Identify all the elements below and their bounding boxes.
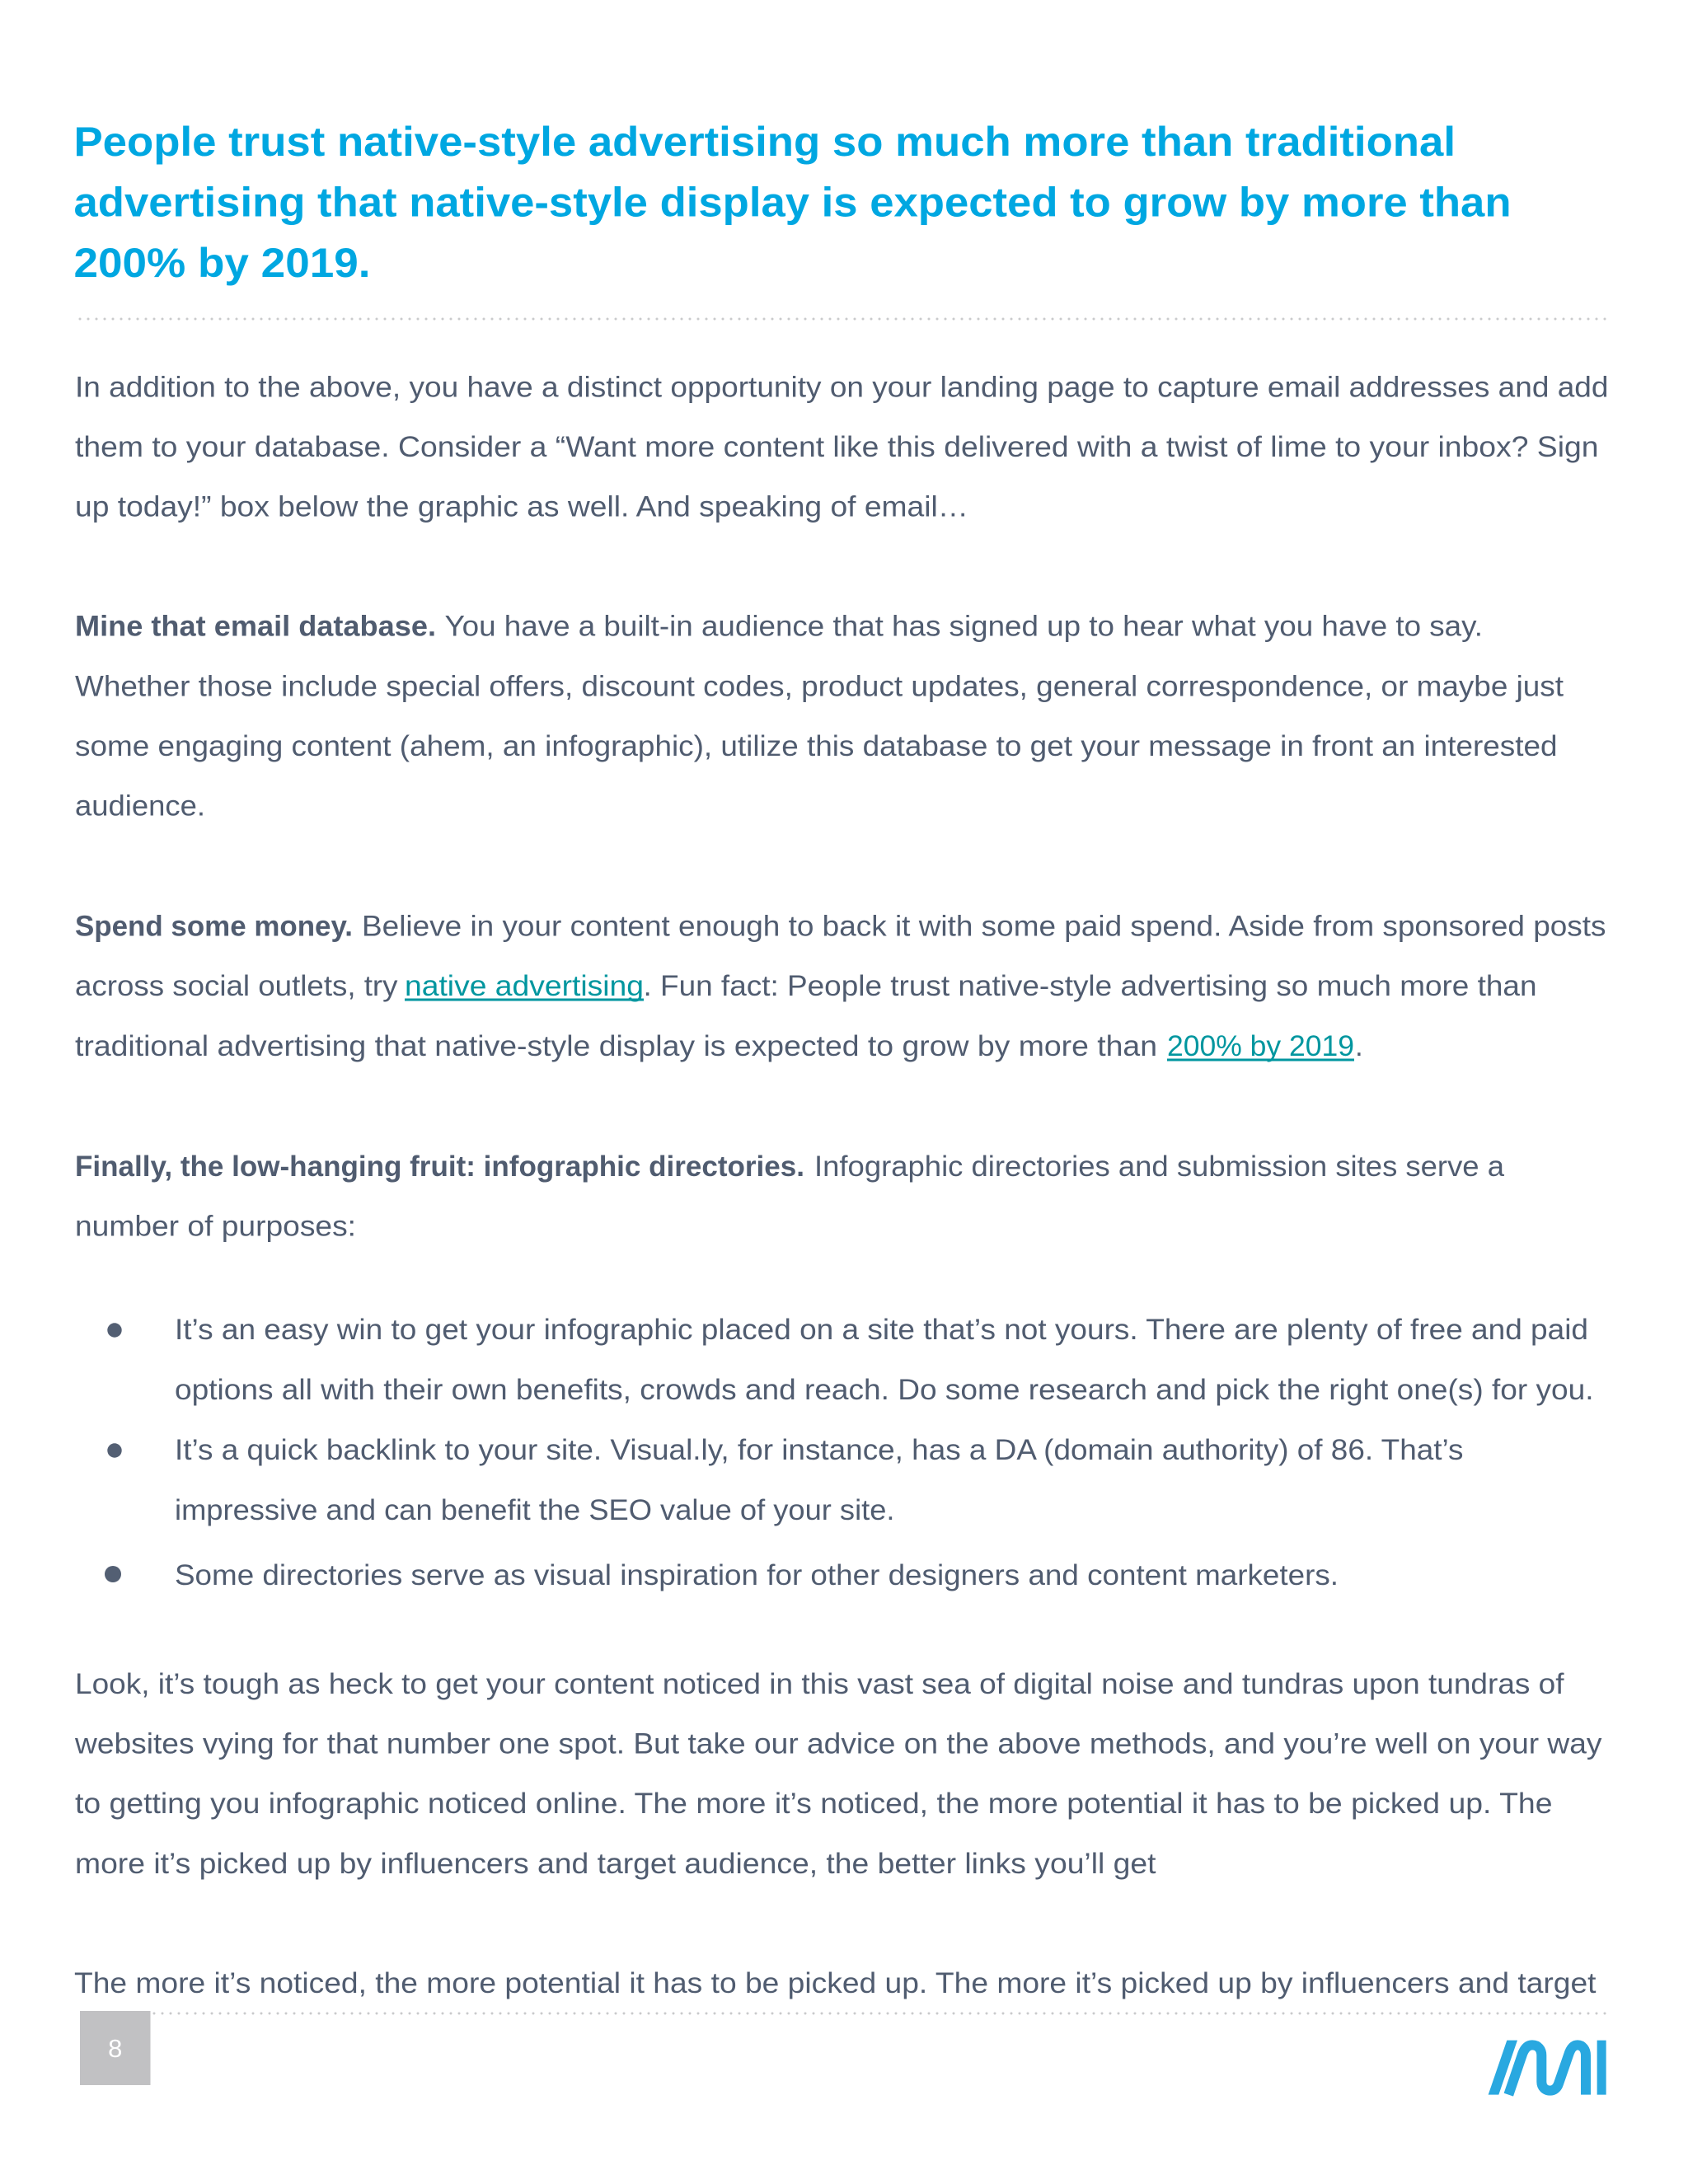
title: [74, 119, 1512, 286]
title: advertising that native-style display is expected to grow by more than: [74, 180, 1512, 226]
paragraph: landing page email capture: In addition to the above, you have a distinct opportunity on your landing page to capture email addresses and add: [75, 371, 1609, 404]
paragraph: spend some money: 200% by 2019: [1167, 1030, 1354, 1062]
paragraph: mine that email database: You have a built-in audience that has signed up to hear what you have to say.: [445, 610, 1483, 643]
paragraph: spend some money: .: [1355, 1030, 1363, 1062]
icon: IMI logo: [1489, 2041, 1606, 2095]
title: People trust native-style advertising so much more than traditional: [74, 119, 1456, 165]
paragraph: landing page email capture: [75, 371, 1609, 523]
paragraph: spend some money: . Fun fact: People trust native-style advertising so much more than: [643, 970, 1536, 1002]
paragraph: closing advice: [74, 1668, 1602, 1880]
paragraph: spend some money: [75, 910, 1606, 1062]
paragraph: spend some money: traditional advertising that native-style display is expected to grow by more than: [75, 1030, 1157, 1062]
paragraph: closing advice: Look, it’s tough as heck to get your content noticed in this vast sea of digital noise and tundras upon tundras of: [75, 1668, 1564, 1700]
bullet: quick backlink: [107, 1434, 1464, 1526]
paragraph: infographic directories: Finally, the low-hanging fruit: infographic directories.: [75, 1151, 804, 1183]
bullet: quick backlink: impressive and can benefit the SEO value of your site.: [175, 1494, 895, 1526]
paragraph: spend some money: Spend some money.: [75, 910, 353, 943]
paragraph: closing advice: websites vying for that number one spot. But take our advice on the above methods, and you’re well on your way: [74, 1727, 1602, 1760]
bullet: visual inspiration: Some directories serve as visual inspiration for other designers and content marketers.: [175, 1559, 1339, 1591]
paragraph: cut-off final line: The more it’s noticed, the more potential it has to be picked up. The more it’s picked up by influencers and target: [74, 1967, 1597, 1999]
page number box: 8: [108, 2034, 122, 2063]
paragraph: landing page email capture: them to your database. Consider a “Want more content like this delivered with a twist of lime to your inbox? Sign: [75, 431, 1599, 463]
paragraph: infographic directories: Infographic directories and submission sites serve a: [814, 1151, 1505, 1183]
bullet: easy win: It’s an easy win to get your infographic placed on a site that’s not yours. There are plenty of free and paid: [175, 1314, 1588, 1346]
paragraph: spend some money: across social outlets, try: [75, 970, 398, 1002]
paragraph: spend some money: Believe in your content enough to back it with some paid spend. Aside from sponsored posts: [362, 910, 1606, 943]
paragraph: spend some money: native advertising: [405, 970, 644, 1002]
paragraph: closing advice: more it’s picked up by influencers and target audience, the better links you’ll get: [75, 1848, 1156, 1880]
bullet: easy win: [107, 1314, 1593, 1406]
paragraph: infographic directories: [75, 1151, 1505, 1243]
paragraph: mine that email database: [75, 610, 1564, 823]
paragraph: closing advice: to getting you infographic noticed online. The more it’s noticed, the more potential it has to be picked up. The: [75, 1788, 1553, 1820]
paragraph: landing page email capture: up today!” box below the graphic as well. And speaking of email…: [75, 491, 968, 523]
paragraph: mine that email database: Whether those include special offers, discount codes, product updates, general correspondence, or maybe just: [75, 671, 1564, 702]
paragraph: mine that email database: audience.: [75, 790, 205, 823]
title: 200% by 2019.: [74, 240, 370, 286]
page number box: [80, 2011, 150, 2085]
paragraph: mine that email database: some engaging content (ahem, an infographic), utilize this database to get your message in front an interested: [75, 730, 1558, 762]
bullet list: [105, 1314, 1594, 1591]
bullet: quick backlink: It’s a quick backlink to your site. Visual.ly, for instance, has a DA (domain authority) of 86. That’s: [175, 1434, 1464, 1466]
paragraph: mine that email database: Mine that email database.: [75, 610, 436, 643]
paragraph: infographic directories: number of purposes:: [75, 1210, 356, 1243]
bullet: easy win: options all with their own benefits, crowds and reach. Do some research and pick the right one(s) for you.: [175, 1374, 1594, 1406]
